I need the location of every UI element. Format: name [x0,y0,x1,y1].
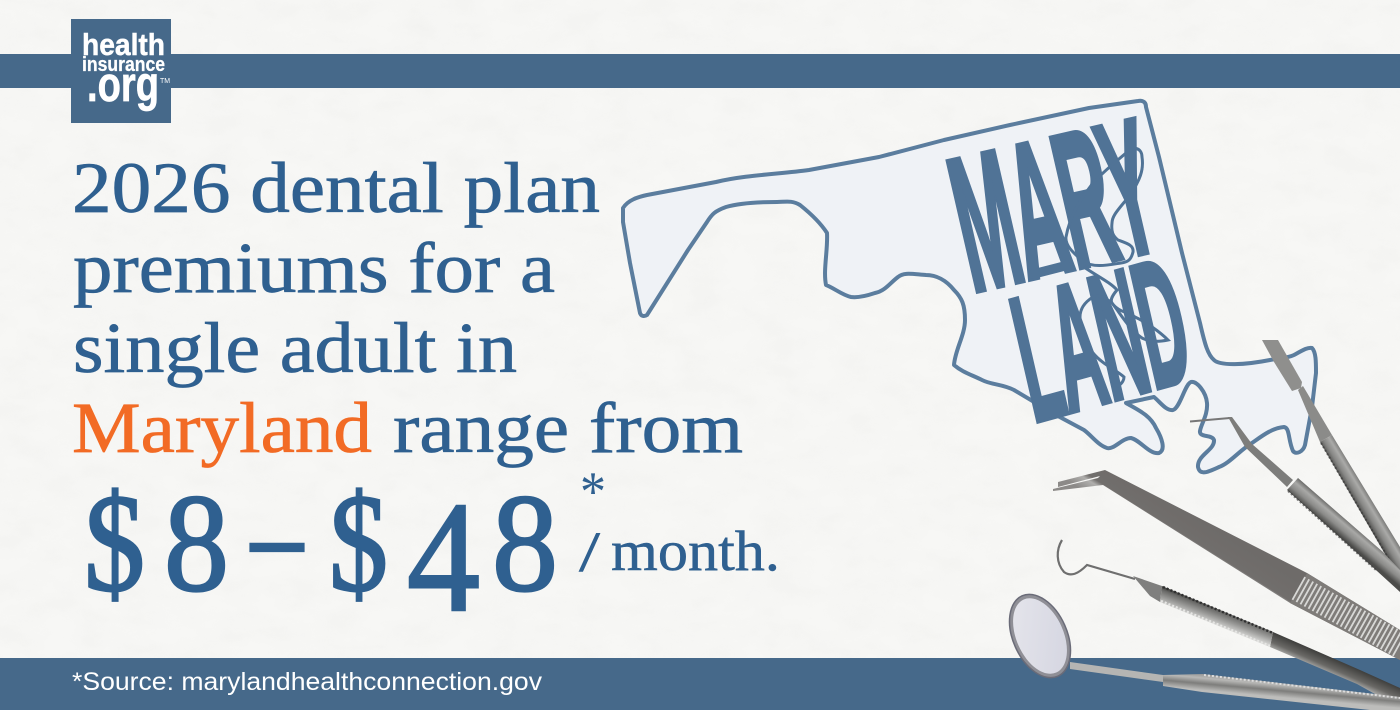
asterisk: * [580,461,606,523]
logo: healthinsurance.org: TM [160,78,170,85]
Maryland map with lettering [623,78,1316,472]
price range: $ [329,466,388,621]
heading: 2026 dental plan [72,148,600,228]
mouth mirror [997,585,1400,710]
heading: Maryland [72,388,372,468]
price range: $ [84,466,145,621]
state outline [623,101,1316,472]
logo: healthinsurance.org: insurance [82,54,165,76]
tweezers [1053,470,1400,660]
price range: 4 [407,470,480,645]
logo: healthinsurance.org: health [82,27,165,62]
logo: healthinsurance.org: .org [87,58,159,112]
LAND lettering: LAND [997,221,1204,460]
spatula instrument [1262,340,1400,580]
per month label: / [579,521,600,584]
heading: range from [393,388,743,468]
price range: – [250,456,304,611]
per month label: month. [611,520,780,583]
probe instrument [1190,417,1400,592]
explorer instrument [1058,540,1400,708]
price range: 8 [492,466,558,621]
bottom band [0,658,1400,710]
heading: premiums for a [73,228,555,308]
lettering underline bar [1030,260,1072,279]
MARY lettering: MARY [933,78,1174,332]
logo: healthinsurance.org [71,19,171,123]
heading [72,148,743,468]
heading: single adult in [73,308,517,388]
top band [0,54,1400,88]
dental instruments [997,340,1400,710]
price range: 8 [164,466,229,621]
source note: *Source: marylandhealthconnection.gov [72,668,543,696]
Chesapeake Bay lines [1066,148,1168,387]
price range [84,456,558,645]
